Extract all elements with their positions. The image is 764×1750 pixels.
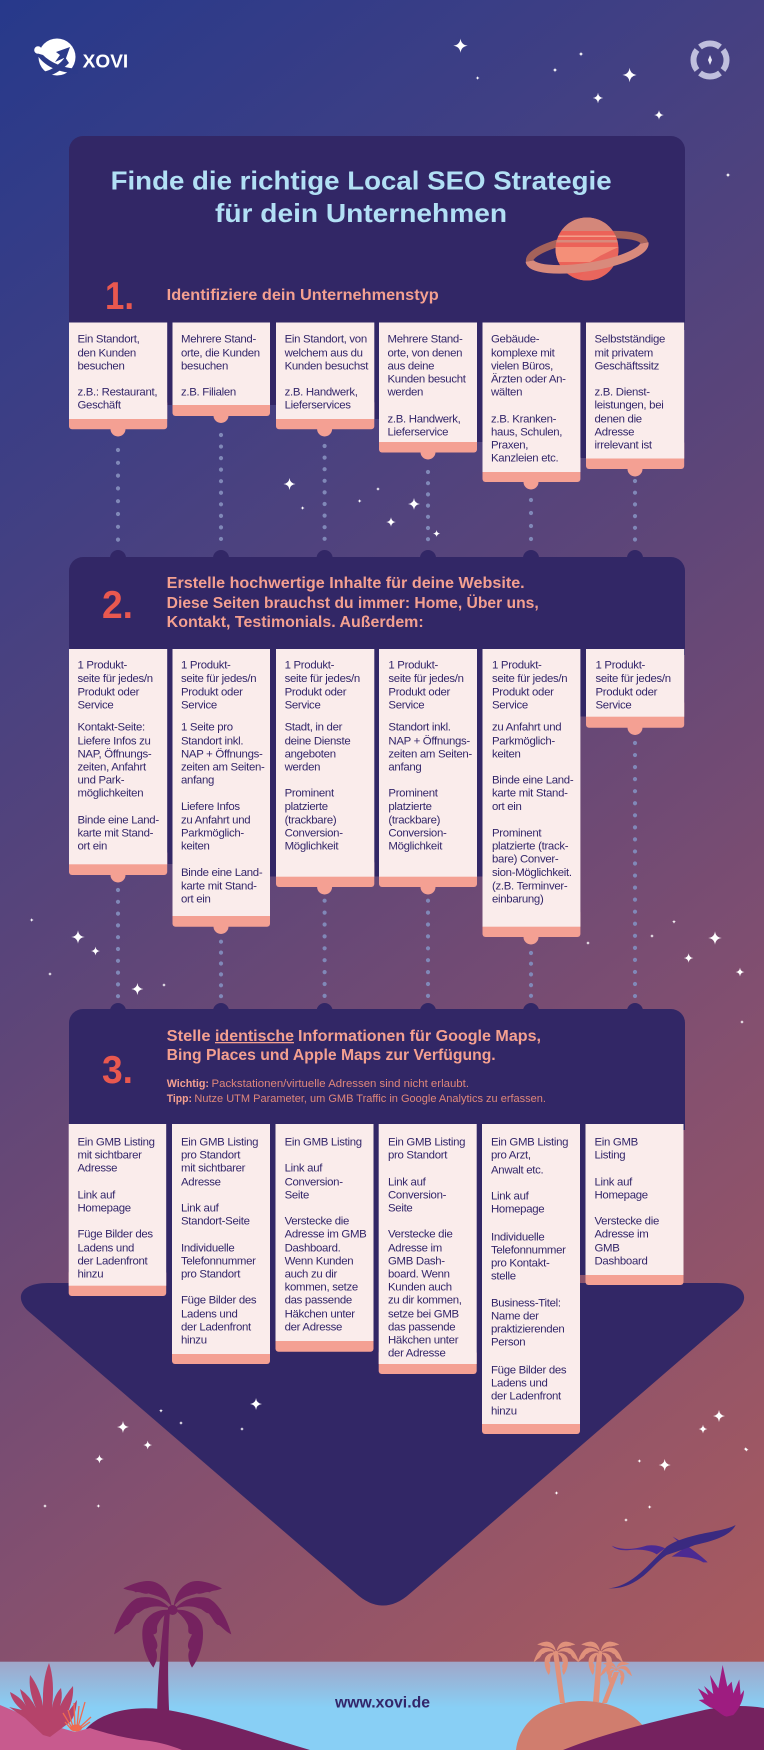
heading: step 3: Bing Places und Apple Maps zur Verfügung. — [167, 1047, 496, 1064]
card 2.4: Conversion- — [388, 827, 447, 839]
dotted connectors: section 2 to 3 — [118, 743, 635, 998]
card 3.4: GMB Dash- — [388, 1255, 445, 1267]
card 3.2: Link auf — [181, 1202, 220, 1214]
card 1.6: irrelevant ist — [594, 440, 653, 452]
card 3.2: pro Standort — [181, 1268, 241, 1280]
card 2.4 — [379, 649, 477, 894]
card 2.6: Produkt oder — [596, 686, 658, 698]
note: Wichtig and Tipp: Packstationen/virtuelle Adressen sind nicht erlaubt. — [212, 1078, 469, 1090]
card 3.4: Ein GMB Listing — [388, 1136, 465, 1148]
card 2.5: sion-Möglichkeit. — [492, 867, 572, 879]
card 3.3: kommen, setze — [285, 1281, 358, 1293]
card 2.6: 1 Produkt- — [596, 659, 646, 671]
card 1.2: z.B. Filialen — [181, 386, 236, 398]
card 3.1: der Ladenfront — [78, 1255, 149, 1267]
card 3.2: Adresse — [181, 1176, 221, 1188]
card 3.6 — [586, 1124, 684, 1285]
step number 2: 2. — [102, 584, 133, 627]
card 1.3 — [276, 322, 374, 436]
card 1.4: Lieferservice — [388, 426, 448, 438]
card 1.1: den Kunden — [78, 348, 136, 360]
illustration: orange grass — [63, 1702, 91, 1732]
card 3.6: Dashboard — [594, 1255, 648, 1267]
card 2.1: und Park- — [78, 774, 125, 786]
card 1.5 — [482, 322, 580, 490]
card 1.5: wälten — [490, 386, 522, 398]
card 2.4: seite für jedes/n — [388, 673, 464, 685]
note: Wichtig and Tipp — [167, 1078, 546, 1105]
card 1.3: Ein Standort, von — [285, 334, 367, 346]
card 2.3: 1 Produkt- — [285, 659, 335, 671]
card 1.1: Geschäft — [78, 400, 122, 412]
card 2.4: Produkt oder — [388, 686, 451, 698]
card 3.2: Individuelle — [181, 1242, 234, 1254]
card 2.1: zeiten, Anfahrt — [78, 761, 147, 773]
card 1.2 — [172, 322, 270, 423]
card 1.2: besuchen — [181, 360, 228, 372]
card 1.6: Geschäftssitz — [594, 360, 660, 372]
card 3.3: Häkchen unter — [285, 1308, 355, 1320]
card 2.1: karte mit Stand- — [78, 827, 154, 839]
card 2.1: Liefere Infos zu — [78, 735, 151, 747]
card 3.5: Name der — [491, 1310, 539, 1322]
card 2.5: zu Anfahrt und — [492, 721, 561, 733]
card 3.5: Business-Titel: — [491, 1297, 561, 1309]
card 1.4 — [379, 322, 477, 460]
card 2.2: seite für jedes/n — [181, 673, 256, 685]
card 3.6: Adresse im — [594, 1228, 648, 1240]
card 1.5: vielen Büros, — [491, 360, 553, 372]
card 1.4: aus deine — [388, 360, 434, 372]
card 3.3: Link auf — [285, 1162, 323, 1174]
card 2.1: NAP, Öffnungs- — [78, 749, 152, 761]
card 3.2 — [172, 1124, 270, 1364]
panel 2: header — [69, 550, 685, 876]
card 2.5: ort ein — [492, 801, 522, 813]
card 2.3: Produkt oder — [285, 686, 347, 698]
card 2.3: Möglichkeit — [285, 840, 339, 852]
card 3.5 — [482, 1124, 580, 1434]
card 1.1: Ein Standort, — [78, 334, 140, 346]
card 3.1: Füge Bilder des — [78, 1228, 153, 1240]
card 1.5: z.B. Kranken- — [491, 414, 557, 426]
card 2.1: 1 Produkt- — [78, 659, 128, 671]
card 2.2: karte mit Stand- — [181, 880, 257, 892]
card 1.6: mit privatem — [594, 348, 653, 360]
card 1.5: haus, Schulen, — [491, 426, 562, 438]
card 3.4: Adresse im — [388, 1242, 442, 1254]
card 3.5: pro Kontakt- — [491, 1257, 550, 1269]
card 2.5: Service — [492, 699, 528, 711]
card 2.5 — [482, 649, 580, 944]
card 3.5: Anwalt etc. — [491, 1164, 544, 1176]
card 1.5: komplexe mit — [491, 348, 556, 360]
card 1.4: Kunden besucht — [388, 374, 467, 386]
card 2.4: Standort inkl. — [388, 721, 451, 733]
card 3.1 — [69, 1124, 166, 1296]
card 2.2 — [172, 649, 270, 934]
card 2.4: NAP + Öffnungs- — [388, 735, 470, 747]
card 3.6: Link auf — [594, 1176, 633, 1188]
heading: step 3: Informationen für Google Maps, — [298, 1028, 541, 1045]
card 2.2: Binde eine Land- — [181, 867, 263, 879]
card 3.1: Adresse — [78, 1162, 117, 1174]
card 3.4: pro Standort — [388, 1149, 448, 1161]
card 3.1: Link auf — [78, 1189, 116, 1201]
card 2.5: (z.B. Terminver- — [492, 880, 568, 892]
card 3.4: das passende — [388, 1321, 455, 1333]
cards: section 2 — [69, 649, 684, 944]
card 2.3: Service — [285, 699, 320, 711]
card 3.2: hinzu — [181, 1334, 207, 1346]
card 1.3: z.B. Handwerk, — [285, 386, 358, 398]
card 2.4: anfang — [388, 761, 421, 773]
card 2.1: Service — [78, 699, 113, 711]
card 1.1: besuchen — [78, 360, 125, 372]
card 3.3: Ein GMB Listing — [285, 1136, 362, 1148]
card 2.2: zeiten am Seiten- — [181, 761, 265, 773]
card 1.5: Praxen, — [491, 440, 528, 452]
card 2.3 — [276, 649, 374, 894]
card 2.4: Möglichkeit — [388, 840, 443, 852]
card 2.1: möglichkeiten — [78, 787, 143, 799]
card 3.4: Link auf — [388, 1176, 427, 1188]
panel 3: header — [69, 1003, 685, 1289]
card 3.5: stelle — [491, 1270, 516, 1282]
heading: step 1: Identifiziere dein Unternehmenstyp — [167, 287, 439, 304]
card 2.3: Conversion- — [285, 827, 343, 839]
card 2.3: deine Dienste — [285, 735, 350, 747]
card 2.2: zu Anfahrt und — [181, 814, 250, 826]
card 2.2: anfang — [181, 774, 214, 786]
card 2.5: Parkmöglich- — [492, 735, 555, 747]
card 1.1: z.B.: Restaurant, — [78, 386, 157, 398]
illustration: left palm — [114, 1581, 231, 1727]
card 2.5: bare) Conver- — [492, 854, 559, 866]
card 1.1 — [69, 322, 167, 436]
card 3.5: Homepage — [491, 1203, 544, 1215]
card 3.2: der Ladenfront — [181, 1321, 252, 1333]
card 1.2: orte, die Kunden — [181, 348, 260, 360]
card 3.6: Listing — [594, 1149, 625, 1161]
card 2.6 — [586, 649, 684, 735]
card 3.5: hinzu — [491, 1405, 517, 1417]
card 2.5: Binde eine Land- — [492, 774, 574, 786]
heading: step 2: Kontakt, Testimonials. Außerdem: — [167, 614, 424, 631]
card 3.3 — [276, 1124, 374, 1352]
illustration: island — [516, 1701, 645, 1750]
card 3.6: Homepage — [594, 1189, 648, 1201]
card 3.3: Verstecke die — [285, 1215, 349, 1227]
card 3.1: hinzu — [78, 1268, 103, 1280]
card 3.4: Kunden auch — [388, 1281, 452, 1293]
card 2.1: ort ein — [78, 840, 107, 852]
dotted connectors: section 1 to 2 — [118, 435, 635, 541]
card 1.4: Mehrere Stand- — [388, 334, 463, 346]
card 3.5: Link auf — [491, 1190, 530, 1202]
card 2.5: 1 Produkt- — [492, 659, 542, 671]
card 2.6: seite für jedes/n — [596, 673, 671, 685]
card 2.3: werden — [284, 761, 320, 773]
website url: www.xovi.de — [334, 1695, 430, 1712]
card 1.2: Mehrere Stand- — [181, 334, 256, 346]
card 2.3: (trackbare) — [285, 814, 337, 826]
card 2.3: Prominent — [285, 787, 335, 799]
heading: step 2: Diese Seiten brauchst du immer: Home, Über uns, — [167, 595, 539, 612]
heading: step 3: identische — [215, 1028, 294, 1045]
card 3.3: Adresse im GMB — [285, 1228, 366, 1240]
card 3.3: das passende — [285, 1294, 352, 1306]
card 2.3: seite für jedes/n — [285, 673, 360, 685]
card 2.4: Service — [388, 699, 424, 711]
card 3.5: pro Arzt, — [491, 1149, 531, 1161]
card 3.4: zu dir kommen, — [388, 1294, 462, 1306]
card 1.4: werden — [386, 386, 423, 398]
illustration: left hill — [85, 1708, 310, 1750]
card 3.5: Telefonnummer — [491, 1244, 566, 1256]
card 2.5: platzierte (track- — [492, 840, 569, 852]
card 1.6: z.B. Dienst- — [594, 386, 650, 398]
card 1.5: Kanzleien etc. — [491, 452, 558, 464]
card 1.3: welchem aus du — [284, 348, 363, 360]
illustration: right plant — [698, 1665, 744, 1717]
logo: XOVI: XOVI — [83, 51, 128, 71]
card 3.2: Füge Bilder des — [181, 1294, 257, 1306]
card 3.3: Wenn Kunden — [285, 1255, 353, 1267]
card 3.2: Telefonnummer — [181, 1255, 256, 1267]
card 3.3: Dashboard. — [285, 1242, 341, 1254]
card 3.5: der Ladenfront — [491, 1390, 562, 1402]
card 1.6: Selbstständige — [594, 334, 665, 346]
card 1.5: Ärzten oder An- — [491, 374, 566, 386]
card 3.5: Person — [491, 1336, 525, 1348]
water — [0, 1662, 764, 1750]
step number 3: 3. — [102, 1049, 133, 1092]
card 2.2: 1 Seite pro — [181, 721, 233, 733]
card 3.4: der Adresse — [388, 1347, 446, 1359]
card 2.1: Binde eine Land- — [78, 814, 159, 826]
card 1.6: denen die — [594, 414, 642, 426]
card 1.3: Lieferservices — [285, 400, 351, 412]
card 2.5: seite für jedes/n — [492, 673, 567, 685]
heading: step 2 — [167, 575, 539, 631]
card 2.5: einbarung) — [492, 893, 544, 905]
card 2.1: seite für jedes/n — [78, 673, 153, 685]
illustration: right hill — [563, 1706, 764, 1750]
card 3.5: Füge Bilder des — [491, 1364, 567, 1376]
card 2.3: angeboten — [285, 749, 336, 761]
note: Wichtig and Tipp: Tipp: — [167, 1093, 192, 1105]
arrow shape — [21, 1283, 744, 1606]
card 2.4: zeiten am Seiten- — [388, 749, 472, 761]
cards: section 3 — [69, 1124, 683, 1434]
card 3.1: Ladens und — [78, 1242, 134, 1254]
card 2.5: Produkt oder — [492, 686, 554, 698]
card 3.5: Ein GMB Listing — [491, 1136, 568, 1148]
illustration: left plant — [9, 1663, 77, 1737]
icon: planet with ring — [527, 217, 647, 281]
illustration: island palms — [534, 1642, 632, 1703]
card 3.5: Individuelle — [491, 1231, 544, 1243]
card 3.1: Ein GMB Listing — [78, 1136, 155, 1148]
card 1.6 — [586, 322, 684, 476]
card 3.4: setze bei GMB — [388, 1308, 459, 1320]
card 1.3: Kunden besuchst — [285, 360, 369, 372]
card 3.4: Verstecke die — [388, 1228, 452, 1240]
card 3.2: Standort-Seite — [181, 1215, 250, 1227]
card 2.2: NAP + Öffnungs- — [181, 749, 263, 761]
card 3.2: Ein GMB Listing — [181, 1136, 258, 1148]
card 2.2: ort ein — [181, 893, 211, 905]
card 3.2: pro Standort — [181, 1149, 241, 1161]
card 2.1: Kontakt-Seite: — [78, 721, 145, 733]
step number 1: 1. — [105, 275, 134, 318]
card 2.2: Parkmöglich- — [181, 827, 244, 839]
title: für dein Unternehmen — [215, 198, 507, 228]
card 1.5: Gebäude- — [491, 334, 540, 346]
card 3.6: GMB — [594, 1242, 620, 1254]
heading: step 3 — [167, 1028, 541, 1064]
title — [111, 165, 612, 228]
card 2.1 — [69, 649, 167, 882]
card 2.5: Prominent — [492, 827, 542, 839]
card 2.3: Stadt, in der — [285, 721, 343, 733]
card 3.3: der Adresse — [285, 1321, 342, 1333]
card 3.4 — [379, 1124, 477, 1374]
card 3.3: Conversion- — [285, 1176, 343, 1188]
card 2.6: Service — [596, 699, 631, 711]
card 2.4: 1 Produkt- — [388, 659, 438, 671]
card 2.3: platzierte — [285, 801, 328, 813]
icon: compass ring — [691, 41, 729, 79]
card 3.1: mit sichtbarer — [78, 1149, 142, 1161]
card 3.1: Homepage — [78, 1202, 131, 1214]
card 2.2: 1 Produkt- — [181, 659, 231, 671]
panel 1: header — [69, 136, 685, 458]
card 1.6: leistungen, bei — [594, 400, 663, 412]
card 3.4: Seite — [388, 1202, 412, 1214]
stars on arrow — [159, 1398, 262, 1431]
card 3.6: Verstecke die — [594, 1215, 659, 1227]
card 2.2: keiten — [181, 840, 210, 852]
card 3.6: Ein GMB — [594, 1136, 638, 1148]
card 2.5: karte mit Stand- — [492, 787, 568, 799]
card 3.5: Ladens und — [491, 1377, 548, 1389]
card 3.4: board. Wenn — [388, 1268, 450, 1280]
illustration: left pink ground — [0, 1705, 182, 1750]
cards: section 1 — [69, 322, 684, 490]
heading: step 2: Erstelle hochwertige Inhalte für deine Website. — [167, 575, 525, 592]
stars — [30, 38, 749, 1522]
card 3.3: auch zu dir — [285, 1268, 338, 1280]
card 2.2: Produkt oder — [181, 686, 243, 698]
card 2.2: Liefere Infos — [181, 801, 240, 813]
card 2.2: Service — [181, 699, 217, 711]
logo: XOVI — [34, 38, 128, 77]
card 3.2: mit sichtbarer — [181, 1162, 246, 1174]
note: Wichtig and Tipp: Wichtig: — [167, 1078, 209, 1090]
note: Wichtig and Tipp: Nutze UTM Parameter, um GMB Traffic in Google Analytics zu erfassen. — [194, 1093, 546, 1105]
card 2.5: keiten — [492, 749, 521, 761]
card 3.3: Seite — [285, 1189, 309, 1201]
card 2.1: Produkt oder — [78, 686, 140, 698]
card 3.4: Conversion- — [388, 1189, 447, 1201]
card 3.2: Ladens und — [181, 1308, 238, 1320]
heading: step 3: Stelle — [167, 1028, 211, 1045]
card 2.2: Standort inkl. — [181, 735, 243, 747]
card 1.4: orte, von denen — [388, 348, 462, 360]
illustration: bird — [608, 1525, 736, 1588]
card 2.4: (trackbare) — [388, 814, 441, 826]
card 2.4: platzierte — [388, 801, 432, 813]
card 1.6: Adresse — [594, 426, 634, 438]
card 3.4: Häkchen unter — [388, 1334, 459, 1346]
title: Finde die richtige Local SEO Strategie — [111, 165, 612, 195]
card 2.4: Prominent — [388, 787, 439, 799]
card 1.4: z.B. Handwerk, — [388, 414, 461, 426]
card 3.5: praktizierenden — [491, 1323, 564, 1335]
